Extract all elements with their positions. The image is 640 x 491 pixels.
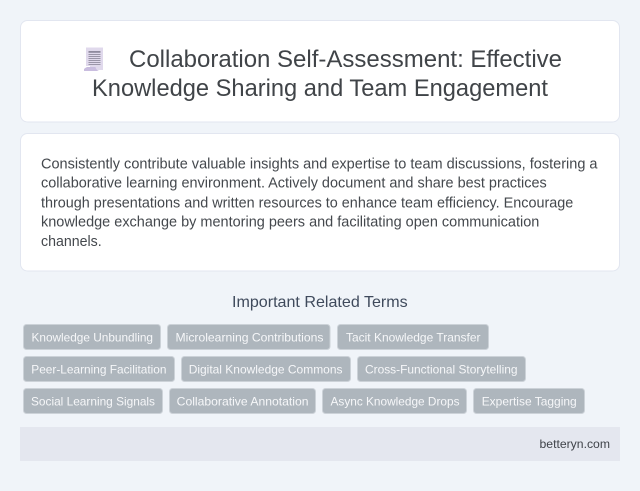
panel: title header [20, 20, 620, 122]
icon: scroll document [84, 48, 103, 71]
text block: description paragraph [41, 156, 598, 250]
tag: Tacit Knowledge Transfer [338, 324, 488, 350]
heading: Important Related Terms: Important Related Terms [232, 294, 408, 311]
footer bar [20, 427, 620, 461]
tag: Peer-Learning Facilitation [24, 356, 174, 382]
tag: Collaborative Annotation [170, 388, 316, 414]
tag: Expertise Tagging [474, 388, 584, 414]
tag: Social Learning Signals [24, 388, 162, 414]
text block: description paragraph: through presentations and written resources to enhance team efficiency. Encourage [41, 195, 573, 211]
title [92, 46, 562, 102]
tag: Knowledge Unbundling: Knowledge Unbundling [32, 330, 153, 344]
tag: Microlearning Contributions [168, 324, 330, 350]
tag: Knowledge Unbundling [24, 324, 160, 350]
text block: description paragraph: knowledge exchange by mentoring peers and facilitating open communication [41, 214, 539, 230]
text block: description paragraph: channels. [41, 234, 102, 250]
tag: Microlearning Contributions: Microlearning Contributions [176, 330, 324, 344]
tag: Cross-Functional Storytelling [358, 356, 526, 382]
tag: Async Knowledge Drops [322, 388, 466, 414]
tag: Cross-Functional Storytelling: Cross-Functional Storytelling [365, 362, 518, 376]
tag: Social Learning Signals: Social Learning Signals [31, 394, 155, 408]
footer source text: betteryn.com [540, 437, 610, 451]
tag: Tacit Knowledge Transfer: Tacit Knowledge Transfer [346, 330, 480, 344]
tag: Digital Knowledge Commons: Digital Knowledge Commons [189, 362, 342, 376]
tag: Collaborative Annotation: Collaborative Annotation [177, 394, 308, 408]
text block: description paragraph: Consistently contribute valuable insights and expertise to team discussions, fostering a [41, 156, 598, 172]
panel: description [20, 134, 620, 271]
tag cloud: related terms [24, 324, 584, 414]
title: Knowledge Sharing and Team Engagement [92, 75, 548, 102]
tag: Peer-Learning Facilitation: Peer-Learning Facilitation [31, 362, 166, 376]
tag: Digital Knowledge Commons [182, 356, 350, 382]
tag: Async Knowledge Drops: Async Knowledge Drops [330, 394, 460, 408]
title: Collaboration Self-Assessment: Effective [129, 46, 562, 73]
tag: Expertise Tagging: Expertise Tagging [482, 394, 577, 408]
text block: description paragraph: collaborative learning environment. Actively document and share best practices [41, 176, 547, 192]
